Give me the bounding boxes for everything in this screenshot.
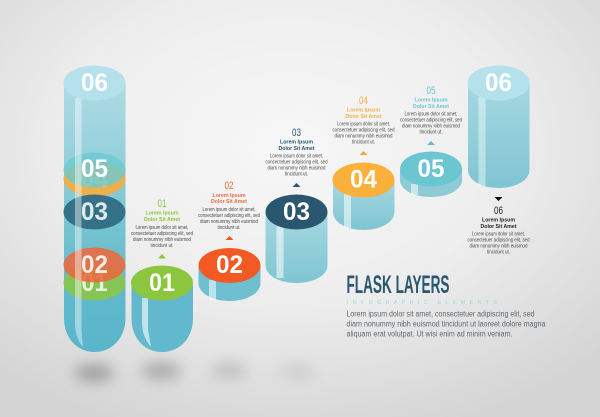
caption 04: diam nonummy nibh euismod — [334, 134, 393, 140]
disc 05: 05 — [418, 155, 445, 183]
disc 05 — [400, 152, 462, 197]
caption 01: Lorem Ipsum — [146, 211, 179, 217]
caption 06: 06 — [494, 205, 503, 217]
caption 04: tincidunt ut. — [352, 140, 375, 146]
caption 04: Lorem ipsum dolor sit amet, — [337, 122, 390, 128]
description: diam nonummy nibh euismod tincidunt ut laoreet dolore magna — [346, 320, 546, 329]
large flask with stacked layers — [64, 66, 126, 352]
cylinder 06: 06 — [485, 69, 512, 97]
caption 06: tincidunt ut. — [487, 250, 510, 256]
caption 02: consectetuer adipiscing elit, sed — [198, 213, 260, 219]
caption 04: Lorem Ipsum — [347, 108, 380, 114]
caption 06 — [468, 197, 530, 256]
layer 02 — [64, 248, 126, 282]
title block — [346, 271, 546, 339]
description: Lorem ipsum dolor sit amet, consectetuer adipiscing elit, sed — [346, 310, 534, 319]
description: aliquam erat volutpat. Ut wisi enim ad minim veniam. — [346, 330, 512, 339]
caption 04: consectetuer adipiscing elit, sed — [332, 128, 395, 134]
layer 03: 03 — [81, 198, 108, 226]
caption 04: Dolor Sit Amet — [346, 114, 382, 120]
caption 01 — [131, 198, 193, 258]
layer 04: 04 — [81, 165, 108, 193]
caption 02: 02 — [224, 180, 234, 192]
caption 01: diam nonummy nibh euismod — [133, 237, 191, 243]
layer 05 — [64, 152, 126, 188]
caption 03: Lorem Ipsum — [280, 140, 313, 146]
cylinder 06 — [468, 66, 530, 188]
description — [346, 310, 546, 339]
layer 04 — [64, 162, 126, 196]
cylinder 03 — [266, 194, 328, 283]
caption 01: 01 — [158, 198, 166, 210]
caption 01: Dolor Sit Amet — [144, 217, 180, 223]
cylinder 04: 04 — [350, 166, 377, 194]
caption 06: Dolor Sit Amet — [480, 224, 517, 230]
disc 02: 02 — [216, 251, 243, 279]
caption 02 — [198, 180, 260, 240]
caption 06: consectetuer adipiscing elit, sed — [468, 238, 530, 244]
caption 06: diam nonummy nibh euismod — [470, 244, 528, 250]
caption 02: Lorem ipsum dolor sit amet, — [202, 207, 256, 213]
caption 05: consectetuer adipiscing elit, sed — [400, 118, 462, 124]
caption 05: diam nonummy nibh euismod — [402, 124, 460, 130]
caption 06: Lorem Ipsum — [482, 218, 515, 224]
caption 04 — [332, 95, 395, 155]
flask top — [64, 66, 126, 100]
layer 05: 05 — [81, 155, 108, 183]
caption 05: Dolor Sit Amet — [413, 104, 449, 110]
caption 05: 05 — [426, 85, 436, 97]
caption 03 — [266, 127, 328, 187]
layer 01 — [64, 266, 126, 300]
caption 02: Lorem Ipsum — [212, 193, 246, 199]
caption 05 — [400, 85, 462, 145]
caption 05: Lorem ipsum dolor sit amet, — [404, 112, 458, 118]
subtitle: INFOGRAPHIC ELEMENTS — [347, 300, 497, 306]
caption 03: Lorem ipsum dolor sit amet, — [270, 154, 323, 160]
cylinder 03: 03 — [283, 198, 310, 226]
flask 01: 01 — [149, 269, 175, 297]
caption 03: tincidunt ut. — [285, 172, 308, 178]
title: FLASK LAYERS — [346, 271, 450, 299]
flask 01 — [131, 266, 193, 352]
caption 01: tincidunt ut. — [150, 243, 174, 249]
caption 03: Dolor Sit Amet — [278, 146, 315, 152]
layer 03 — [64, 194, 126, 230]
caption 02: tincidunt ut. — [218, 225, 240, 231]
disc 02 — [198, 248, 260, 301]
caption 04: 04 — [359, 95, 368, 107]
caption 01: consectetuer adipiscing elit, sed — [131, 231, 193, 237]
caption 03: 03 — [292, 127, 301, 139]
caption 05: tincidunt ut. — [420, 130, 442, 136]
caption 06: Lorem ipsum dolor sit amet, — [472, 232, 525, 238]
caption 02: diam nonummy nibh euismod — [200, 219, 258, 225]
caption 02: Dolor Sit Amet — [211, 199, 247, 205]
glass highlight — [75, 98, 83, 347]
caption 03: diam nonummy nibh euismod — [268, 166, 326, 172]
number 06: 06 — [81, 69, 108, 97]
caption 05: Lorem Ipsum — [414, 98, 448, 104]
floor shadows — [74, 362, 315, 382]
cylinder 04 — [332, 162, 394, 230]
caption 03: consectetuer adipiscing elit, sed — [266, 160, 328, 166]
layer 02: 02 — [81, 251, 108, 279]
layer 01: 01 — [82, 269, 108, 297]
caption 01: Lorem ipsum dolor sit amet, — [136, 225, 188, 231]
